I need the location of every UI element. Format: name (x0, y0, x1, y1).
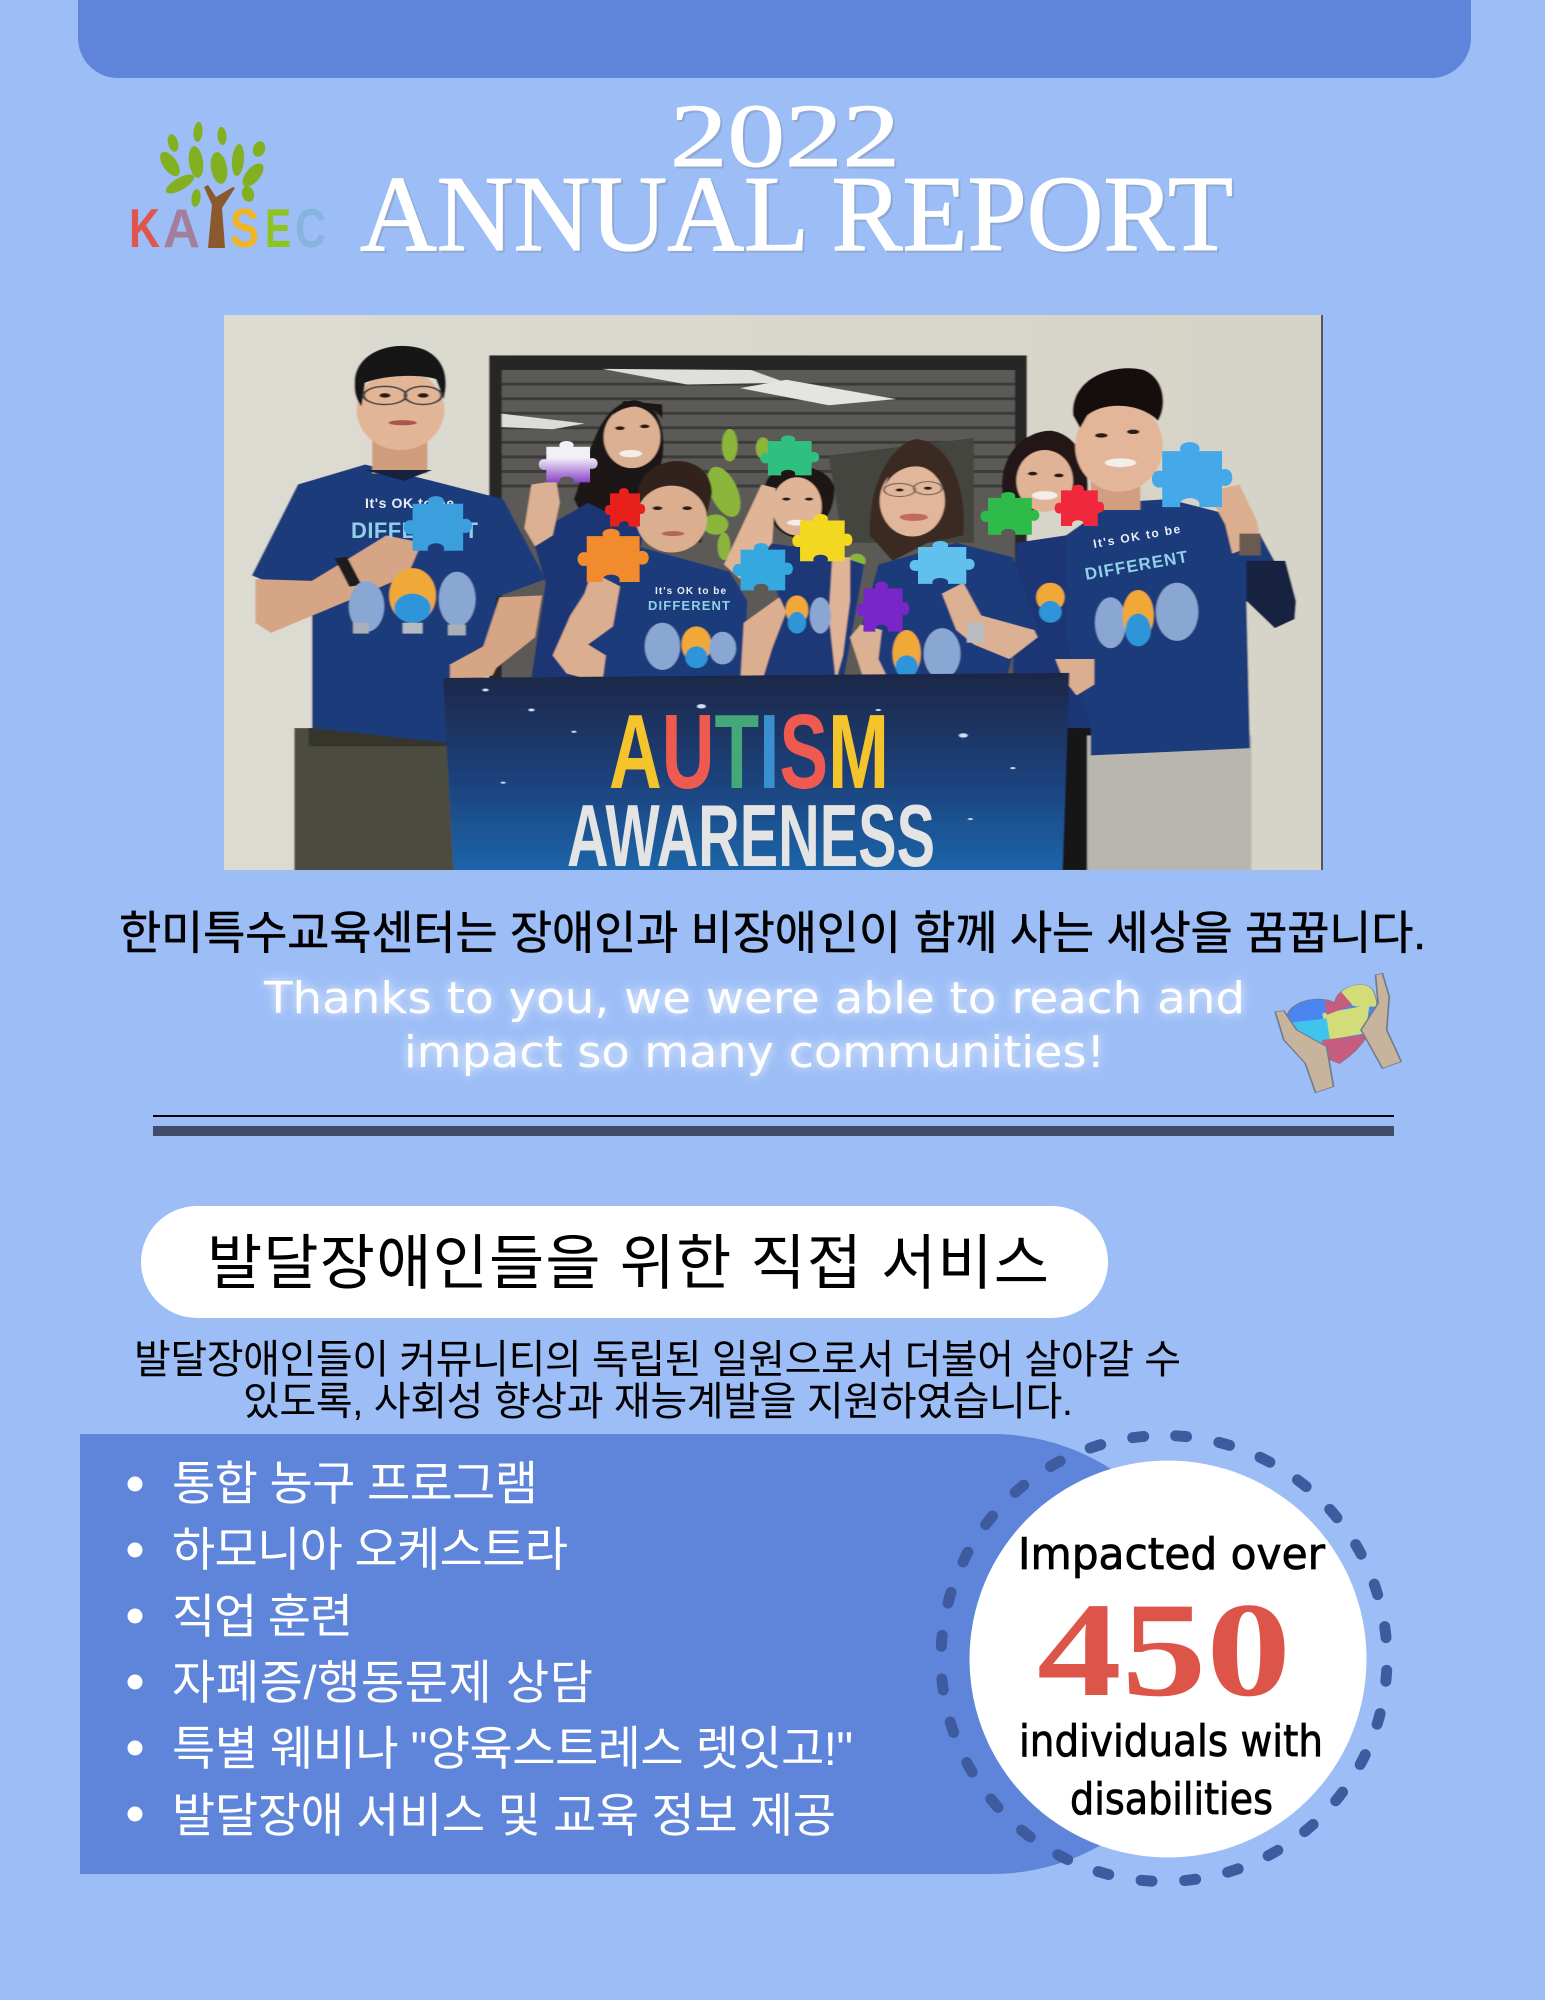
logo: KAISEC tree: C (295, 197, 326, 259)
man right (1087, 735, 1251, 874)
title: 2022 (672, 89, 902, 188)
Korean mission statement: 한미특수교육센터는 장애인과 비장애인이 함께 사는 세상을 꿈꿉니다. (119, 907, 1426, 959)
woman center back (765, 466, 834, 537)
title (360, 87, 1235, 276)
shirt lettering: DIFFERENT (1083, 547, 1190, 584)
callout: impact circle: disabilities (1070, 1774, 1273, 1825)
shirt lettering: DIFFERENT (351, 518, 479, 543)
woman back right (1002, 431, 1088, 514)
panel: services list: 통합 농구 프로그램 (172, 1457, 538, 1510)
panel: services list: 자폐증/행동문제 상담 (172, 1656, 593, 1709)
woman glasses front (870, 439, 964, 561)
shirt lettering: It's OK to be (365, 495, 454, 511)
title: ANNUAL REPORT (360, 155, 1233, 274)
girl back left (574, 400, 664, 535)
logo: KAISEC tree: S (230, 197, 259, 259)
shirt lettering: It's OK to be (1092, 522, 1181, 551)
shirt lettering: DIFFERENT (648, 598, 730, 613)
banner text (568, 714, 933, 867)
banner cloth (443, 673, 1069, 874)
banner text: AWARENESS (567, 786, 935, 885)
callout: impact circle (930, 1424, 1398, 1893)
title: 2022 (670, 87, 900, 186)
panel: services list: 직업 훈련 (172, 1590, 353, 1643)
logo: KAISEC tree: E (265, 197, 291, 259)
glowing thank-you text: Thanks to you, we were able to reach and (263, 973, 1245, 1024)
panel: services list: 발달장애 서비스 및 교육 정보 제공 (172, 1789, 836, 1842)
logo: KAISEC tree: K (129, 197, 160, 259)
section description: 발달장애인들이 커뮤니티의 독립된 일원으로서 더불어 살아갈 수 (134, 1338, 1181, 1382)
logo: KAISEC tree: A (163, 197, 200, 259)
banner text: AUTISM (609, 693, 889, 811)
panel: services list (80, 1434, 1212, 1874)
callout: impact circle: individuals with (1019, 1716, 1323, 1767)
glowing thank-you text: impact so many communities! (404, 1027, 1105, 1078)
woman front center (638, 461, 712, 543)
callout: impact circle: 450 (1037, 1576, 1291, 1725)
title: ANNUAL REPORT (362, 157, 1235, 276)
shirt lettering (351, 495, 1190, 613)
section heading pill: 발달장애인들을 위한 직접 서비스 (207, 1230, 1049, 1297)
glowing thank-you text (263, 973, 1245, 1078)
top banner bar (78, 0, 1471, 78)
section heading pill (141, 1206, 1108, 1318)
panel: services list: 하모니아 오케스트라 (172, 1523, 568, 1576)
shirt lettering: It's OK to be (655, 586, 726, 597)
callout: impact circle: Impacted over (1018, 1529, 1326, 1580)
section description (134, 1338, 1181, 1424)
photo: team holding autism awareness banner (220, 310, 1330, 885)
icon: hands holding puzzle heart (1275, 973, 1401, 1093)
logo: KAISEC tree (129, 122, 326, 259)
puzzle pieces (404, 435, 1232, 632)
man left (294, 728, 456, 874)
panel: services list: 특별 웨비나 "양육스트레스 렛잇고!" (172, 1722, 853, 1775)
section description: 있도록, 사회성 향상과 재능계발을 지원하였습니다. (243, 1380, 1073, 1424)
